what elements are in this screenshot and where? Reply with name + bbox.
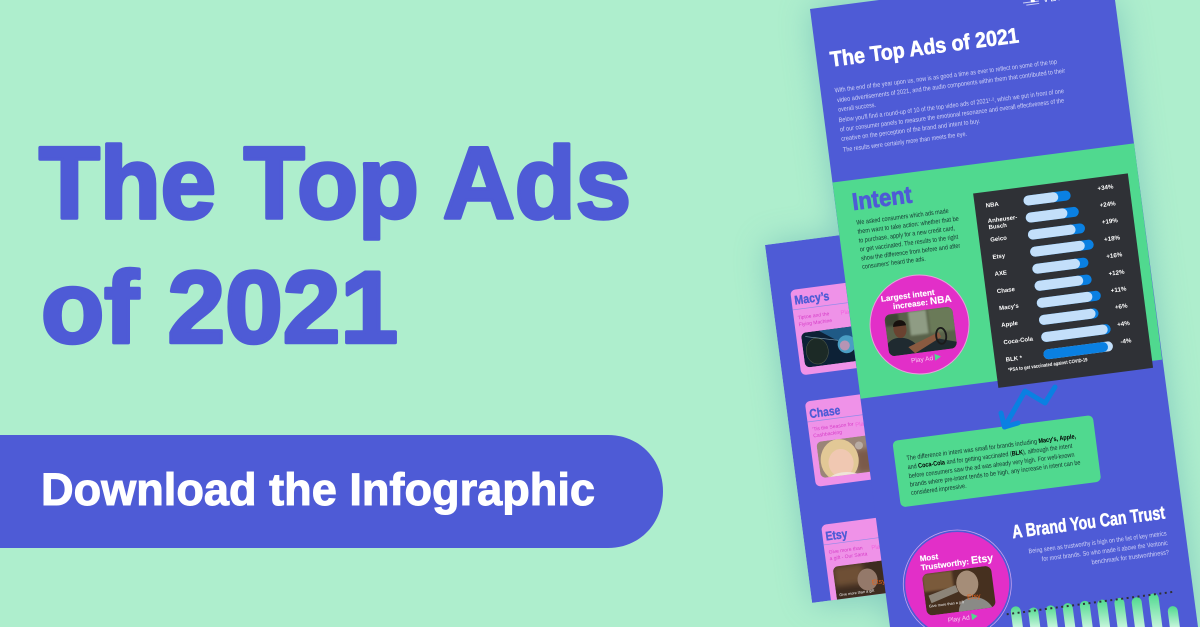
card: Etsy: Give more than a gift xyxy=(839,589,875,597)
bar values: +12% xyxy=(1108,269,1125,278)
download banner xyxy=(0,435,663,548)
play ad: Play Ad xyxy=(911,355,934,365)
bar labels: Macy's xyxy=(999,304,1020,312)
bar values: +11% xyxy=(1110,286,1127,295)
photo: Etsy ad: Give more than a gift xyxy=(929,600,965,609)
card: Chase: Play Ad xyxy=(855,420,876,429)
bar labels: BLK * xyxy=(1006,356,1023,364)
photo: NBA ad xyxy=(884,306,959,357)
intro text: Below you'll find a round-up of 10 of the top video ads of 2021¹·², which we put in front of one xyxy=(838,88,1065,124)
intro text: overall success. xyxy=(838,102,877,114)
callout: small intent differences: before consumers saw the ad was already very high. For well-known xyxy=(908,452,1075,480)
play ad: Play Ad xyxy=(947,614,971,624)
intent description: show the difference from before and after xyxy=(861,243,961,262)
trust description: Being seen as trustworthy is high on the list of key metrics xyxy=(1028,530,1168,555)
card: Etsy: Play Ad xyxy=(871,543,892,552)
trust description: benchmark for trustworthiness? xyxy=(1091,549,1170,566)
photo: Etsy ad: Etsy xyxy=(967,593,982,602)
intro text: creative on the perception of the brand and intent to buy. xyxy=(841,118,981,143)
panel: intent xyxy=(833,143,1163,406)
card: Macy's: Flying Machine xyxy=(798,318,833,328)
main title xyxy=(39,126,631,364)
callout: small intent differences: and Coca-Cola and for getting vaccinated (BLK), although the intent xyxy=(907,443,1073,471)
card: Macy's: Tiptoe and the xyxy=(797,311,830,321)
card: Etsy: Etsy xyxy=(872,578,887,587)
benchmark line xyxy=(1007,592,1174,614)
bar values: +34% xyxy=(1097,183,1114,192)
intent description: to purchase, apply for a new credit card, xyxy=(858,225,956,245)
main title: of 2021 xyxy=(41,250,398,364)
arrow: zigzag pointing to callout xyxy=(1001,387,1055,427)
intent description: consumers' heard the ads. xyxy=(862,256,926,271)
logo xyxy=(1022,0,1105,7)
back infographic sheet xyxy=(765,235,886,603)
bar labels: AXE xyxy=(994,270,1007,278)
callout: small intent differences: The difference in intent was small for brands including Macy's, Apple, xyxy=(906,433,1077,462)
photo: Etsy ad xyxy=(922,565,997,616)
card: Chase: Cashbacking xyxy=(813,430,843,439)
callout circle: most trustworthy Etsy xyxy=(903,530,1011,627)
callout: small intent differences xyxy=(892,415,1101,507)
front infographic sheet xyxy=(810,0,1198,627)
heading: The Top Ads of 2021: The Top Ads of 2021 xyxy=(829,23,1020,72)
card: Chase: 'Tis the Season for xyxy=(812,421,854,433)
intro text: The results were certainly more than meets the eye. xyxy=(843,131,968,154)
intent description xyxy=(856,207,964,271)
card: Macy's xyxy=(790,282,856,375)
intro text: of our consumer panels to measure the emotional resonance and overall effectiveness of the xyxy=(840,98,1065,134)
bar values: +24% xyxy=(1099,200,1117,209)
callout circle: largest intent increase NBA xyxy=(870,274,970,374)
intro text xyxy=(834,58,1073,154)
card: Chase: Chase xyxy=(809,403,841,421)
bar values: +4% xyxy=(1117,320,1131,329)
callout circle: most trustworthy Etsy: Trustworthy: Etsy xyxy=(920,552,994,573)
bar labels: Anheuser- xyxy=(988,215,1018,225)
card: Etsy: a gift - Our Santa xyxy=(829,551,868,562)
heading: Intent: Intent xyxy=(851,182,914,216)
bar labels: Chase xyxy=(997,287,1016,295)
bar values: -4% xyxy=(1120,337,1132,346)
bar values: +19% xyxy=(1102,217,1119,226)
bar chart: trustworthiness xyxy=(1007,592,1180,627)
card: Etsy: Etsy xyxy=(825,527,848,544)
card: Macy's: Play Ad xyxy=(840,308,861,317)
intent description: them want to take action: whether that be xyxy=(857,216,960,236)
bar labels: Etsy xyxy=(992,253,1006,261)
callout circle: largest intent increase NBA: increase: NBA xyxy=(892,294,952,312)
bar labels: Busch xyxy=(988,223,1008,231)
callout circle: most trustworthy Etsy: Most xyxy=(919,552,939,563)
callout circle: largest intent increase NBA: Largest intent xyxy=(880,288,935,304)
trust description xyxy=(1028,530,1170,574)
trust description: for most brands. So who made it above the Veritonic xyxy=(1041,540,1169,563)
bar labels: NBA xyxy=(986,202,1000,209)
intent description: or get vaccinated. The results to the right xyxy=(860,234,959,254)
card: Macy's: Macy’s xyxy=(794,289,830,308)
callout: small intent differences: considered impressive. xyxy=(911,483,967,497)
bar labels: Apple xyxy=(1001,321,1019,329)
bars xyxy=(1023,187,1114,360)
bar labels: Coca-Cola xyxy=(1003,336,1034,346)
bar values: +6% xyxy=(1115,303,1128,311)
card: Etsy: Give more than xyxy=(828,545,863,556)
bar chart: intent change by brand xyxy=(973,173,1153,388)
card: Chase xyxy=(805,394,871,486)
footnote: *PSA to get vaccinated against COVID-19 xyxy=(1008,357,1088,373)
callout: small intent differences: brands where pre-intent tends to be high, any increase in intent can be xyxy=(910,459,1081,489)
intent description: We asked consumers which ads made xyxy=(856,208,949,227)
bar values: +18% xyxy=(1104,234,1121,244)
download banner: Download the Infographic xyxy=(41,464,595,515)
bar labels xyxy=(986,200,1036,364)
intro text: With the end of the year upon us, now is as good a time as ever to reflect on some of the top xyxy=(834,59,1058,94)
bar values xyxy=(1097,183,1134,346)
bar values: +16% xyxy=(1106,251,1123,260)
bar labels: Geico xyxy=(990,236,1008,244)
sheet shadows xyxy=(765,0,1198,627)
card: Etsy xyxy=(822,518,886,600)
intro text: video advertisements of 2021, and the audio components within them that contributed to their xyxy=(837,68,1066,104)
main title: The Top Ads xyxy=(39,126,631,240)
